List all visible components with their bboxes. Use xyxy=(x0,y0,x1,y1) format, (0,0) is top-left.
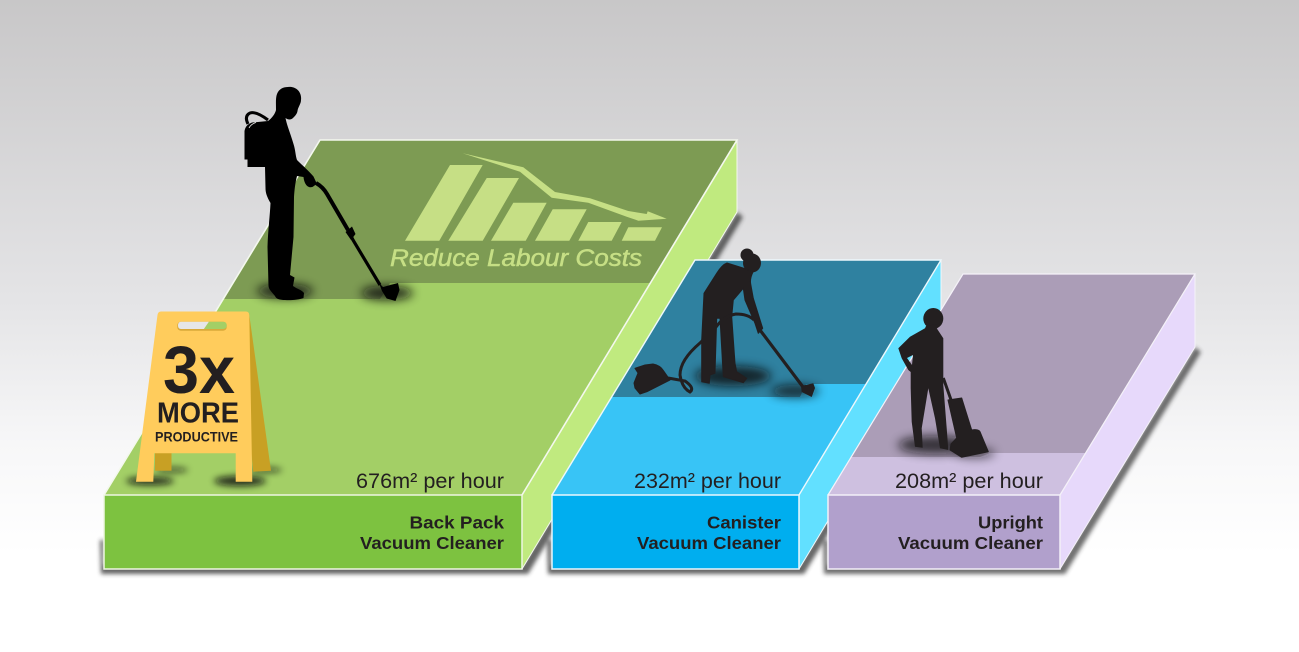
text: reduce labour costs: Reduce Labour Costs xyxy=(390,245,642,272)
label: upright vacuum cleaner: Upright xyxy=(978,512,1043,532)
purple block front face xyxy=(828,495,1060,569)
label: canister vacuum cleaner xyxy=(637,512,781,553)
sign: 3x more productive: MORE xyxy=(157,398,239,430)
figure: woman with upright vacuum xyxy=(898,308,995,458)
green block front face xyxy=(104,495,522,569)
arrow: downward cost trend xyxy=(463,153,667,221)
text: 208 per hour: 208m² per hour xyxy=(895,470,1043,493)
label: upright vacuum cleaner: Vacuum Cleaner xyxy=(898,533,1043,553)
label: back pack vacuum cleaner: Back Pack xyxy=(410,512,504,532)
figure: woman with canister vacuum xyxy=(634,248,819,397)
purple block top surface xyxy=(828,274,1195,495)
panel: upright vacuum cleaner xyxy=(823,274,1201,574)
blue block top surface xyxy=(552,260,941,495)
purple block side face xyxy=(1060,274,1195,569)
blue block front face xyxy=(552,495,799,569)
green block top surface xyxy=(104,140,737,495)
panel: canister vacuum cleaner xyxy=(547,260,947,574)
green block side face xyxy=(522,140,737,569)
dark floor area: uncleaned xyxy=(223,140,737,299)
label: back pack vacuum cleaner: Vacuum Cleaner xyxy=(360,533,504,553)
label: canister vacuum cleaner: Vacuum Cleaner xyxy=(637,533,781,553)
sign: 3x more productive xyxy=(126,312,282,486)
panel: back pack vacuum cleaner xyxy=(100,140,743,574)
chart: falling costs bars xyxy=(405,165,662,241)
sign: 3x more productive: 3x xyxy=(163,333,235,408)
label: canister vacuum cleaner: Canister xyxy=(707,512,781,532)
label: upright vacuum cleaner xyxy=(898,512,1043,553)
dark floor area: uncleaned xyxy=(851,274,1195,457)
dark floor area: uncleaned xyxy=(612,260,941,397)
blue block side face xyxy=(799,260,941,569)
figure: man with back pack vacuum xyxy=(244,87,413,301)
text: 232 per hour: 232m² per hour xyxy=(634,470,781,493)
label: back pack vacuum cleaner xyxy=(360,512,504,553)
sign: 3x more productive: PRODUCTIVE xyxy=(155,428,238,444)
text: 676 per hour: 676m² per hour xyxy=(356,470,504,493)
